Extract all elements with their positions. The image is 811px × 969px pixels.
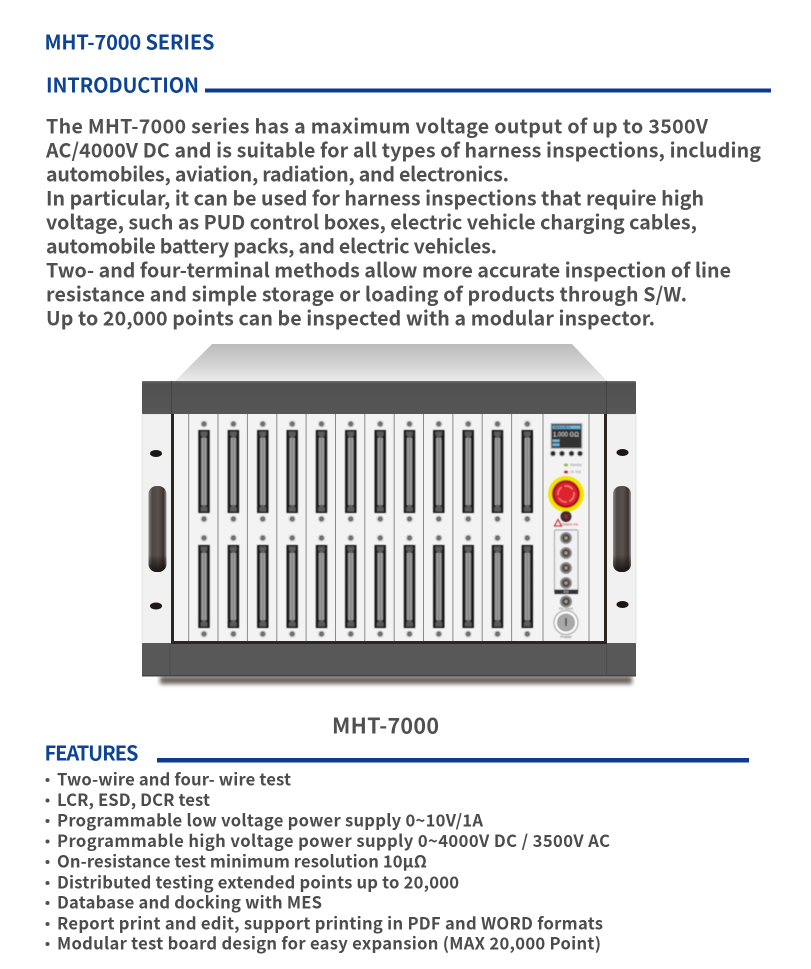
chassis top surface [175, 344, 607, 381]
control module [548, 423, 584, 639]
features list: LCR, ESD, DCR test [57, 787, 210, 811]
slot dividers [189, 414, 589, 641]
introduction text block: Two- and four-terminal methods allow more accurate inspection of line [46, 254, 731, 283]
left handle [148, 486, 166, 572]
introduction text block: Up to 20,000 points can be inspected with a modular inspector. [46, 302, 655, 331]
right handle [613, 486, 631, 572]
product caption: MHT-7000 [332, 709, 439, 740]
series title: MHT-7000 SERIES [44, 26, 214, 55]
display screen: INSULRES [554, 426, 571, 430]
introduction text block: voltage, such as PUD control boxes, electric vehicle charging cables, [46, 206, 697, 235]
section heading: introduction [46, 69, 771, 98]
section heading: introduction: INTRODUCTION [46, 69, 199, 98]
introduction text block: In particular, it can be used for harness inspections that require high [46, 182, 704, 211]
power key switch: Power [560, 634, 572, 639]
status indicators: Standby [570, 463, 582, 467]
right rack ear [606, 414, 636, 644]
round switch [560, 511, 572, 522]
introduction text block: AC/4000V DC and is suitable for all types of harness inspections, including [45, 134, 761, 163]
manufacturer logo [554, 520, 578, 526]
section heading: features: FEATURES [44, 737, 138, 766]
features list: Two-wire and four- wire test [57, 766, 291, 790]
introduction text block [45, 110, 761, 331]
status indicators [564, 463, 582, 474]
4W connector box [554, 530, 578, 594]
emergency stop button [548, 476, 584, 512]
chassis floor shadow [160, 676, 632, 684]
features list: Programmable high voltage power supply 0~4000V DC / 3500V AC [57, 828, 610, 852]
features list: Report print and edit, support printing in PDF and WORD formats [57, 910, 603, 934]
bottom cap [142, 641, 636, 676]
introduction text block: The MHT-7000 series has a maximum voltage output of up to 3500V [46, 110, 709, 139]
4W connector box: 4W [563, 590, 569, 594]
mounting holes [150, 449, 628, 610]
introduction text block: automobiles, aviation, radiation, and electronics. [46, 158, 509, 187]
display screen: 1.000 GΩ [553, 432, 579, 438]
introduction text block: automobile battery packs, and electric vehicles. [46, 230, 497, 259]
twelve test modules with connectors [198, 421, 533, 637]
introduction text block: resistance and simple storage or loading of products through S/W. [46, 278, 687, 307]
features list: Programmable low voltage power supply 0~10V/1A [57, 807, 483, 831]
status indicators: On Test [570, 470, 581, 474]
left rack ear [142, 414, 172, 644]
display buttons [551, 451, 582, 456]
feature bullets [46, 778, 50, 946]
manufacturer logo: Dawon Ins [562, 522, 578, 526]
features list: Modular test board design for easy expansion (MAX 20,000 Point) [57, 930, 601, 954]
FW switch [559, 596, 573, 610]
features list: Distributed testing extended points up to 20,000 [57, 869, 459, 893]
features list [46, 766, 610, 954]
FW switch: FW Switch [559, 606, 573, 610]
display screen [550, 423, 582, 449]
features list: On-resistance test minimum resolution 10μΩ [57, 848, 427, 872]
features list: Database and docking with MES [57, 889, 322, 913]
section heading: features [44, 737, 749, 766]
module bay [171, 412, 607, 644]
top cap [142, 381, 636, 414]
product image: MHT-7000 rack chassis [142, 344, 636, 684]
power key switch [554, 610, 578, 639]
